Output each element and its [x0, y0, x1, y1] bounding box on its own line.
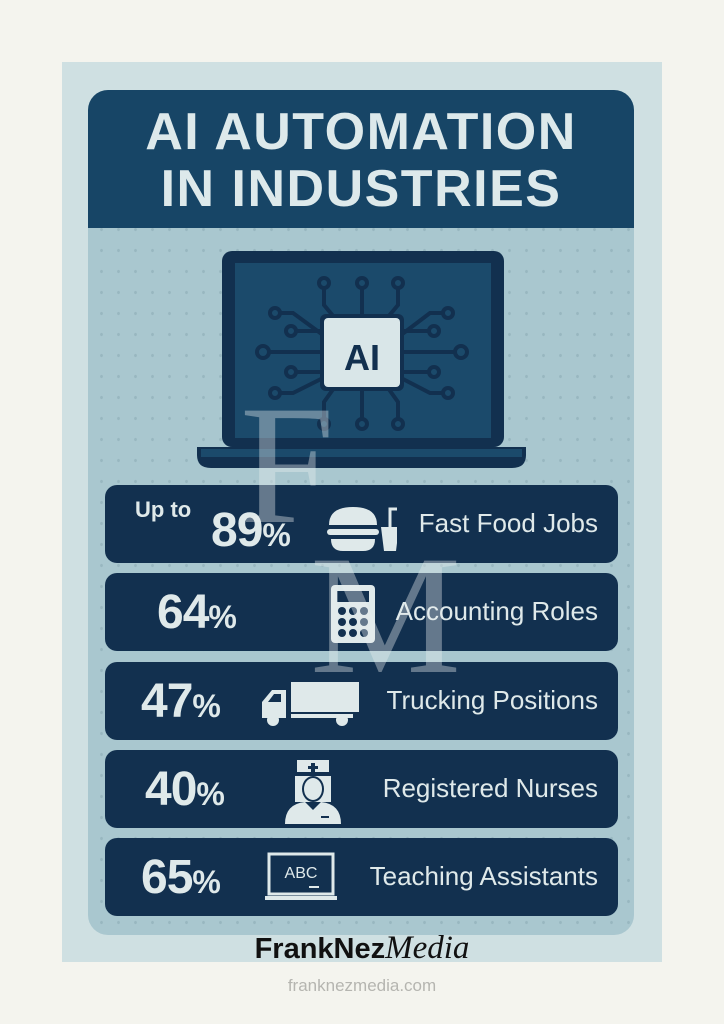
header: title: IN INDUSTRIES	[161, 160, 561, 218]
row: accounting: 64%	[157, 586, 237, 639]
icon: truck	[262, 682, 359, 726]
row: accounting	[105, 573, 618, 651]
outer panel	[62, 62, 662, 962]
watermark FM: M	[310, 521, 451, 709]
icon: laptop with AI chip	[197, 251, 526, 468]
icon: burger and drink	[327, 507, 397, 551]
row: trucking: 47%	[141, 675, 221, 728]
icon: calculator	[331, 585, 375, 643]
row: nurses: Registered Nurses	[383, 773, 598, 803]
icon: ABC board	[265, 852, 337, 900]
icon: ABC board: ABC	[285, 865, 317, 882]
row: accounting: Accounting Roles	[396, 596, 598, 626]
row: nurses	[105, 750, 618, 828]
icon: laptop with AI chip: AI	[344, 337, 380, 378]
row: teaching: 65%	[141, 851, 221, 904]
watermark FM	[240, 371, 456, 709]
row: fast food: Up to	[135, 497, 191, 522]
row: nurses: 40%	[145, 763, 225, 816]
footer brand: FrankNezMedia	[255, 930, 469, 966]
icon: nurse	[285, 760, 341, 824]
header: title: AI AUTOMATION	[145, 103, 577, 161]
row: fast food: 89%	[211, 504, 291, 557]
row: fast food: Fast Food Jobs	[419, 508, 598, 538]
footer url: franknezmedia.com	[288, 976, 436, 995]
watermark FM: F	[240, 371, 325, 559]
row: trucking	[105, 662, 618, 740]
row: teaching: Teaching Assistants	[370, 861, 598, 891]
header: title	[88, 90, 634, 228]
card	[88, 90, 634, 935]
row: fast food	[105, 485, 618, 563]
row: trucking: Trucking Positions	[387, 685, 598, 715]
row: teaching	[105, 838, 618, 916]
